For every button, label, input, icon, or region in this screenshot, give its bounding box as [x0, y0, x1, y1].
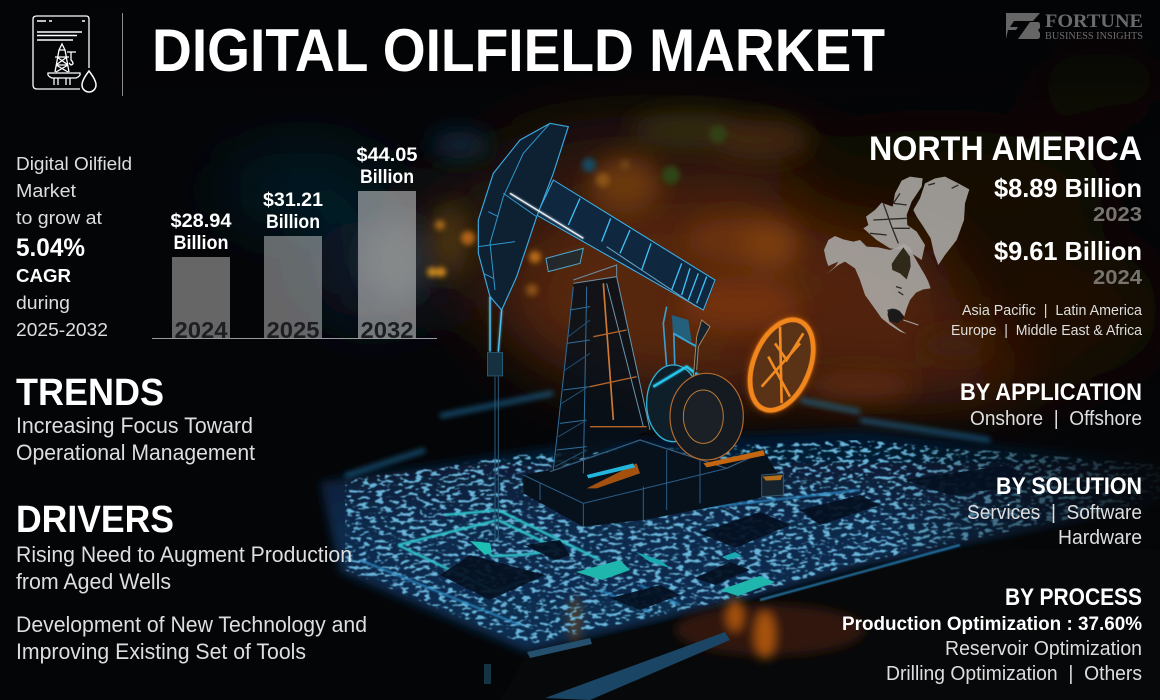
orange reflection below the board — [569, 596, 865, 659]
bar 2025 — [263, 189, 323, 343]
panel: by solution: Hardware — [1058, 527, 1142, 549]
other regions: Europe | Middle East & Africa — [951, 322, 1143, 339]
other regions — [951, 302, 1143, 339]
pumpjack tower — [546, 248, 650, 473]
north america 2024 value: $9.61 Billion — [994, 236, 1142, 266]
panel: CAGR summary: during — [16, 293, 70, 313]
panel: by solution: BY SOLUTION — [996, 473, 1142, 500]
bar 2032: Billion — [360, 166, 414, 188]
logo: Fortune Business Insights: BUSINESS INSIGHTS — [1045, 31, 1143, 42]
panel: by process: Drilling Optimization | Others — [886, 663, 1142, 685]
bar 2024: $28.94 — [170, 210, 232, 232]
north america 2023 value — [994, 173, 1142, 226]
bar 2024: 2024 — [174, 317, 228, 343]
header icon: document with oil rig and drop — [33, 16, 96, 92]
bar 2024: Billion — [174, 232, 228, 254]
pumpjack horsehead — [478, 123, 583, 540]
panel: trends: Increasing Focus Toward — [16, 413, 253, 438]
map: north america — [824, 177, 969, 334]
panel: by process — [842, 584, 1142, 685]
panel: by application: BY APPLICATION — [960, 379, 1142, 406]
panel: trends — [16, 372, 255, 465]
bar 2025: $31.21 — [263, 189, 323, 211]
logo: Fortune Business Insights: FORTUNE — [1045, 11, 1143, 32]
panel: drivers: DRIVERS — [16, 499, 174, 541]
panel: by process: Reservoir Optimization — [945, 638, 1142, 660]
panel: CAGR summary: Digital Oilfield — [16, 154, 132, 174]
panel: north america — [824, 130, 1143, 339]
bar chart: market size — [152, 144, 437, 343]
title: DIGITAL OILFIELD MARKET — [152, 17, 885, 84]
panel: north america: NORTH AMERICA — [869, 130, 1142, 168]
panel: CAGR summary: to grow at — [16, 208, 102, 228]
north america 2024 value: 2024 — [1093, 267, 1143, 289]
bar 2032: 2032 — [360, 317, 414, 343]
pumpjack illustration — [478, 123, 829, 540]
board right-side fade — [880, 420, 1160, 550]
panel: by process: Production Optimization : 37.60% — [842, 614, 1142, 635]
other regions: Asia Pacific | Latin America — [962, 302, 1143, 319]
panel: drivers: Improving Existing Set of Tools — [16, 639, 306, 664]
panel: trends: Operational Management — [16, 440, 255, 465]
panel: CAGR summary: Market — [16, 181, 76, 201]
panel: by solution — [967, 473, 1142, 549]
panel: CAGR summary: 5.04% — [16, 234, 85, 262]
bar 2024 — [170, 210, 232, 343]
pumpjack glowing orange wheel — [734, 307, 829, 423]
pumpjack walking beam — [537, 180, 715, 310]
north america 2024 value — [994, 236, 1143, 289]
circuit board — [320, 393, 1160, 700]
panel: drivers — [16, 499, 367, 664]
panel: drivers: Development of New Technology and — [16, 612, 367, 637]
logo: Fortune Business Insights — [1006, 11, 1143, 42]
panel: CAGR summary: 2025-2032 — [16, 320, 108, 340]
bar 2025: 2025 — [266, 317, 320, 343]
bar 2025: Billion — [266, 211, 320, 233]
panel: by process: BY PROCESS — [1005, 584, 1142, 611]
bar 2032: $44.05 — [356, 144, 418, 166]
panel: CAGR summary: CAGR — [16, 266, 71, 286]
bar 2032 — [356, 144, 418, 343]
header divider — [122, 13, 123, 96]
panel: by solution: Services | Software — [967, 502, 1142, 524]
board speckle texture — [345, 440, 1160, 645]
pumpjack pitman arm and crank — [647, 307, 743, 460]
panel: drivers: from Aged Wells — [16, 569, 171, 594]
pumpjack base — [523, 277, 783, 527]
panel: by application: Onshore | Offshore — [970, 408, 1142, 430]
north america 2023 value: $8.89 Billion — [994, 173, 1142, 203]
north america 2023 value: 2023 — [1093, 204, 1142, 226]
panel: by application — [960, 379, 1142, 430]
panel: drivers: Rising Need to Augment Production — [16, 542, 352, 567]
panel: CAGR summary — [16, 154, 132, 340]
panel: trends: TRENDS — [16, 372, 164, 414]
